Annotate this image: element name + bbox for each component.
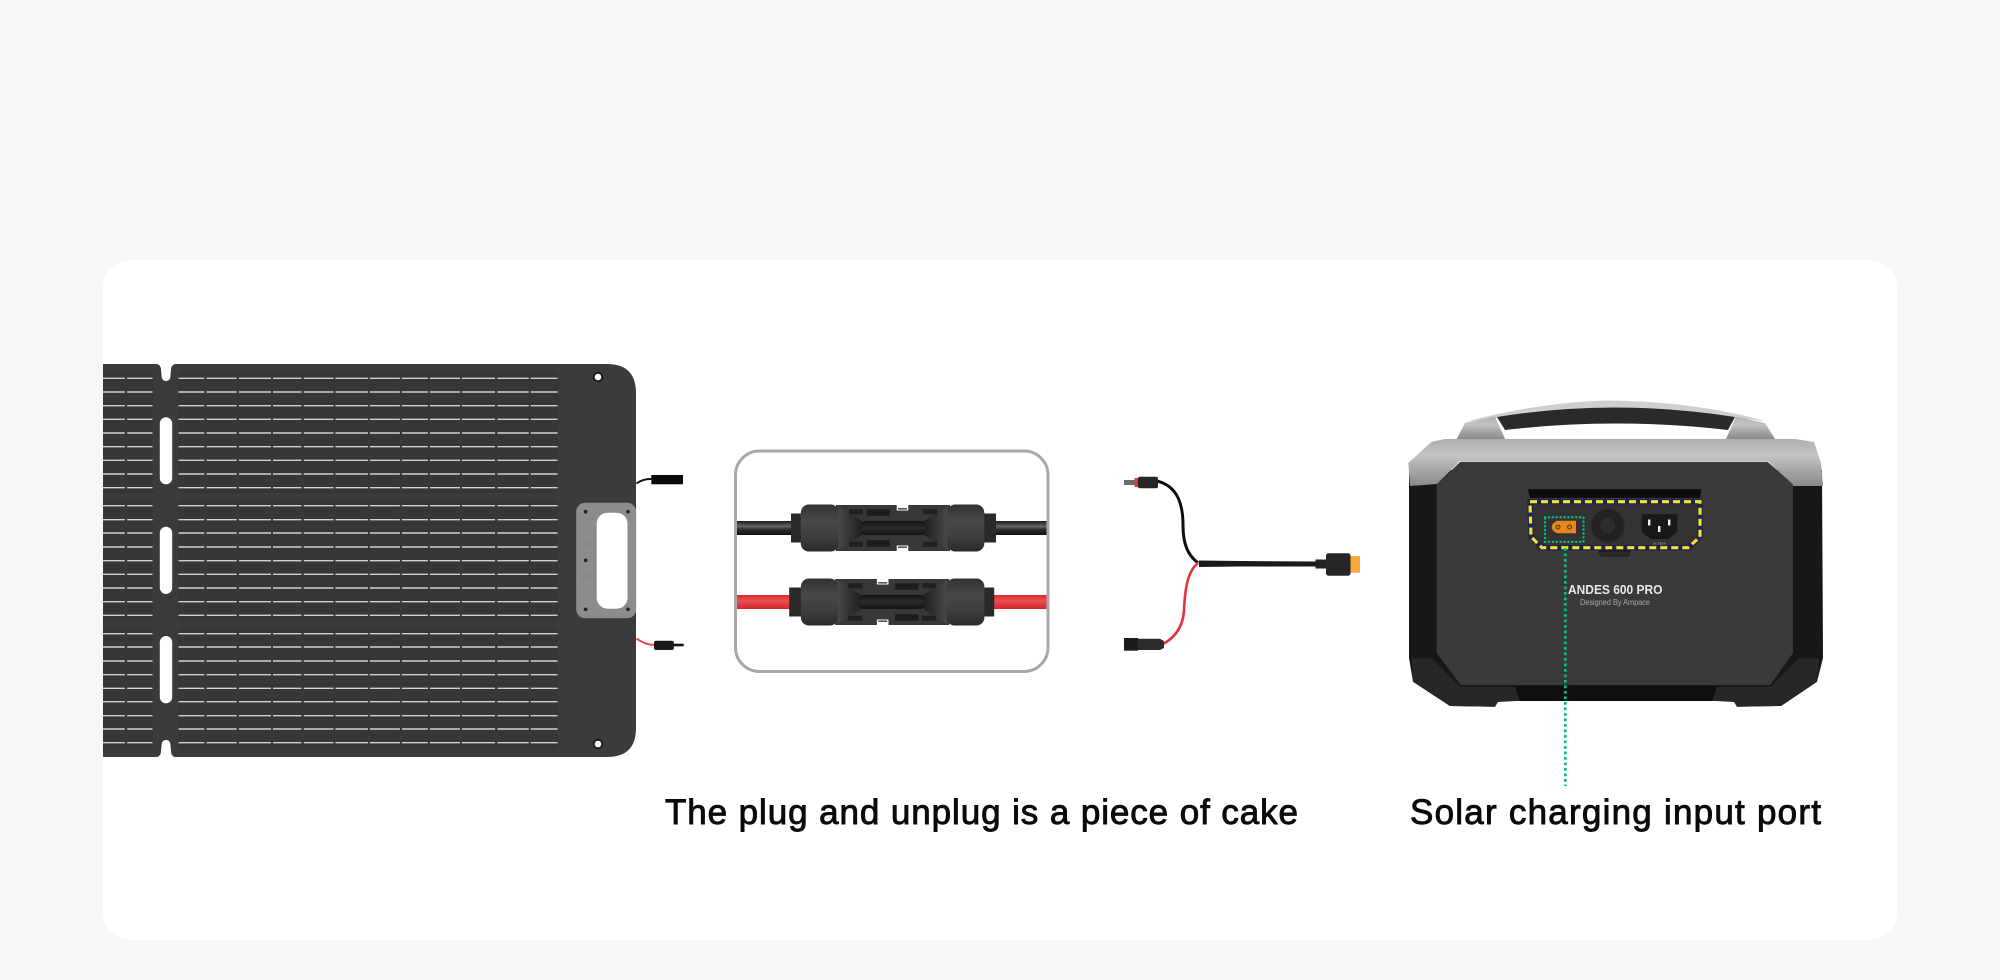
silver top shell <box>1408 439 1823 486</box>
red branch <box>1163 563 1198 644</box>
carry handle <box>1457 400 1775 439</box>
panel notches and slots <box>157 364 175 757</box>
black lead <box>636 475 683 484</box>
black connector <box>791 504 996 552</box>
main cable <box>1199 560 1316 567</box>
red cable <box>737 595 1046 609</box>
AC inlet: ac input <box>1653 542 1665 546</box>
port recess <box>1528 489 1702 556</box>
AC inlet <box>1642 514 1677 546</box>
red connector <box>789 578 994 626</box>
caption: solar charging input port: Solar charging input port <box>1410 793 1821 832</box>
hazard outline <box>1530 502 1700 548</box>
green dotted leader line <box>1564 548 1567 786</box>
product tagline: Designed By Ampace <box>1580 598 1650 607</box>
tab <box>1599 551 1630 556</box>
product name: ANDES 600 PRO <box>1568 582 1662 597</box>
cell blocks <box>103 371 558 750</box>
black branch <box>1157 481 1198 563</box>
XT60 plug <box>1316 553 1360 576</box>
red lead <box>636 638 684 650</box>
power button <box>1591 509 1624 542</box>
close-up frame <box>736 451 1048 672</box>
connector close-up box <box>736 451 1048 672</box>
solar panel <box>103 364 684 757</box>
panel: white card <box>103 260 1897 940</box>
solar input port <box>1552 521 1576 533</box>
power station <box>1408 400 1823 707</box>
black cable <box>737 521 1046 535</box>
mounting holes <box>593 372 603 749</box>
cell lines <box>103 378 558 743</box>
green highlight box <box>1545 517 1584 542</box>
Y-branch cable <box>1124 477 1360 651</box>
caption: plug and unplug: The plug and unplug is a piece of cake <box>665 793 1298 832</box>
hazard dashes <box>1530 502 1700 548</box>
bottom bumpers <box>1412 658 1819 707</box>
bottom MC4 plug <box>1124 638 1164 651</box>
solar panel sheet <box>103 364 636 757</box>
front face <box>1438 463 1792 684</box>
carry handle <box>576 503 636 618</box>
top MC4 plug <box>1124 477 1158 488</box>
dark body base <box>1409 470 1823 707</box>
